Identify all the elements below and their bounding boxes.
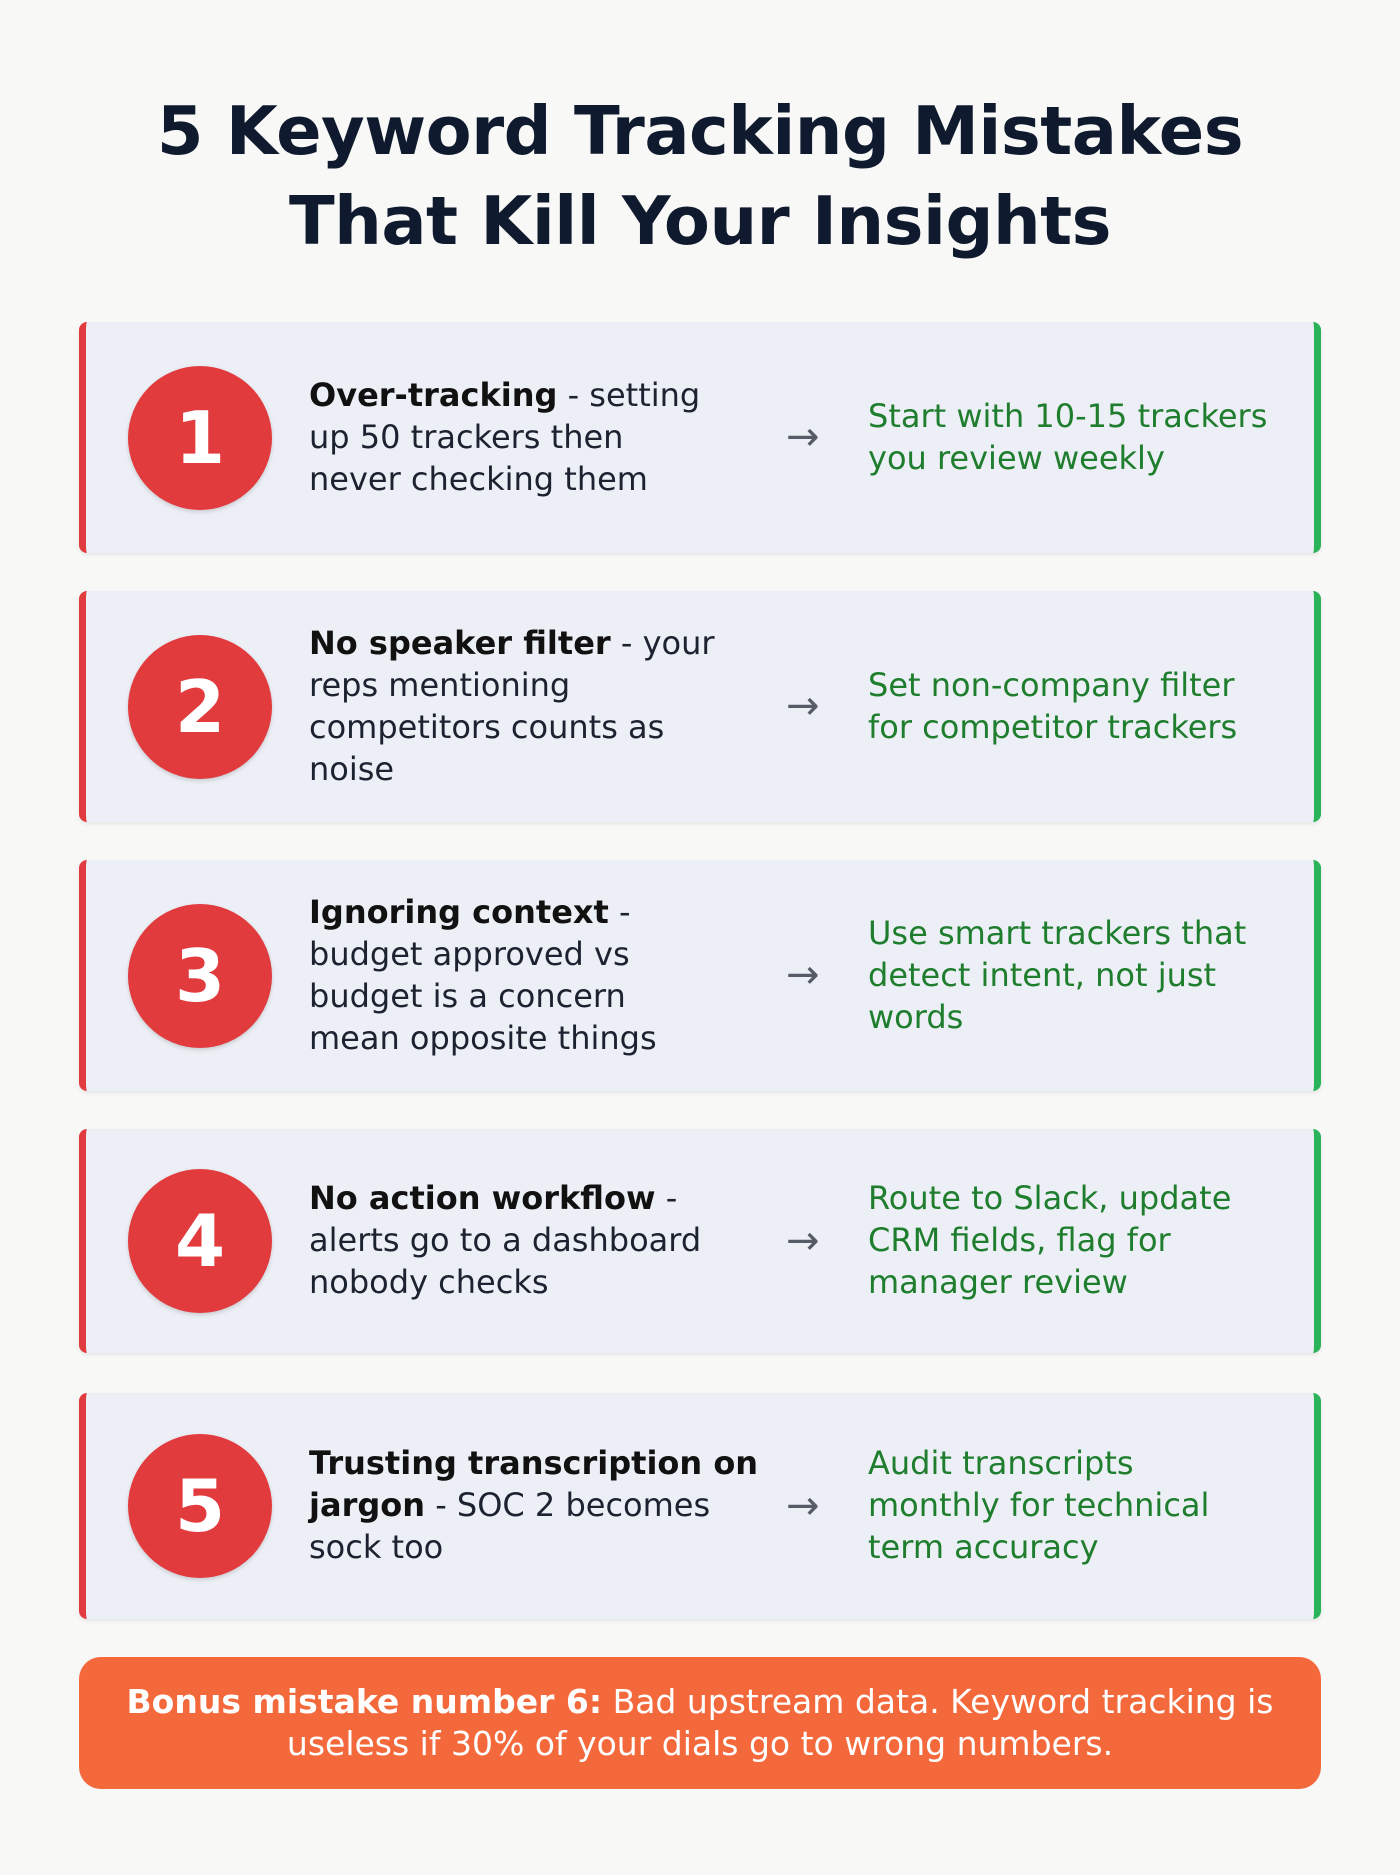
panel: mistake 1 bbox=[79, 322, 1321, 553]
text: mistake 2: No speaker filter - your bbox=[309, 624, 715, 662]
callout: bonus mistake: Bonus mistake number 6: Bad upstream data. Keyword tracking is bbox=[127, 1682, 1273, 1721]
text: fix 1: you review weekly bbox=[868, 439, 1165, 477]
text: mistake 4 bbox=[309, 1179, 701, 1301]
text: fix 1 bbox=[868, 397, 1267, 477]
title: 5 Keyword Tracking Mistakes bbox=[157, 92, 1243, 170]
text: mistake 3: budget approved vs bbox=[309, 935, 630, 973]
panel: mistake 5 bbox=[79, 1393, 1321, 1619]
icon: number 1 bbox=[128, 366, 272, 510]
text: fix 1: Start with 10-15 trackers bbox=[868, 397, 1267, 435]
text: mistake 1: never checking them bbox=[309, 460, 648, 498]
arrow: → bbox=[786, 414, 820, 460]
icon: number 4: 4 bbox=[175, 1199, 225, 1283]
icon: number 3: 3 bbox=[175, 934, 225, 1018]
icon: number 3 bbox=[128, 904, 272, 1048]
panel: mistake 4 bbox=[79, 1129, 1321, 1353]
text: mistake 5: sock too bbox=[309, 1528, 443, 1566]
text: fix 4: CRM fields, flag for bbox=[868, 1221, 1171, 1259]
text: fix 4 bbox=[868, 1179, 1231, 1301]
text: fix 2 bbox=[868, 666, 1237, 746]
text: fix 2: Set non-company filter bbox=[868, 666, 1234, 704]
arrow: → bbox=[786, 1218, 820, 1264]
text: mistake 4: No action workflow - bbox=[309, 1179, 677, 1217]
icon: number 5: 5 bbox=[175, 1464, 225, 1548]
text: mistake 5 bbox=[308, 1444, 758, 1566]
text: fix 3 bbox=[868, 914, 1246, 1036]
panel: mistake 2 bbox=[79, 591, 1321, 822]
text: mistake 1 bbox=[309, 376, 700, 498]
text: fix 4: Route to Slack, update bbox=[868, 1179, 1231, 1217]
text: mistake 4: nobody checks bbox=[309, 1263, 549, 1301]
text: fix 3: words bbox=[868, 998, 963, 1036]
text: fix 3: Use smart trackers that bbox=[868, 914, 1246, 952]
arrow: → bbox=[786, 683, 820, 729]
text: mistake 5: jargon - SOC 2 becomes bbox=[309, 1486, 710, 1524]
text: fix 4: manager review bbox=[868, 1263, 1128, 1301]
icon: number 5 bbox=[128, 1434, 272, 1578]
text: fix 3: detect intent, not just bbox=[868, 956, 1216, 994]
text: mistake 2: competitors counts as bbox=[309, 708, 664, 746]
title bbox=[157, 92, 1243, 260]
text: fix 5: term accuracy bbox=[868, 1528, 1099, 1566]
icon: number 2: 2 bbox=[175, 665, 225, 749]
text: mistake 2: reps mentioning bbox=[309, 666, 570, 704]
text: mistake 4: alerts go to a dashboard bbox=[309, 1221, 701, 1259]
icon: number 4 bbox=[128, 1169, 272, 1313]
title: That Kill Your Insights bbox=[289, 182, 1111, 260]
icon: number 2 bbox=[128, 635, 272, 779]
text: mistake 3: mean opposite things bbox=[309, 1019, 657, 1057]
callout: bonus mistake bbox=[79, 1657, 1321, 1789]
text: mistake 3: Ignoring context - bbox=[309, 893, 631, 931]
text: mistake 2 bbox=[309, 624, 715, 788]
text: mistake 5: Trusting transcription on bbox=[309, 1444, 758, 1482]
text: fix 5: Audit transcripts bbox=[868, 1444, 1134, 1482]
text: fix 5: monthly for technical bbox=[868, 1486, 1209, 1524]
panel: mistake 3 bbox=[79, 860, 1321, 1091]
callout: bonus mistake: useless if 30% of your dials go to wrong numbers. bbox=[287, 1724, 1113, 1763]
text: mistake 3 bbox=[309, 893, 657, 1057]
text: mistake 1: up 50 trackers then bbox=[309, 418, 623, 456]
text: mistake 3: budget is a concern bbox=[309, 977, 626, 1015]
text: fix 2: for competitor trackers bbox=[868, 708, 1237, 746]
arrow: → bbox=[786, 1483, 820, 1529]
text: mistake 1: Over-tracking - setting bbox=[309, 376, 700, 414]
text: mistake 2: noise bbox=[309, 750, 394, 788]
text: fix 5 bbox=[868, 1444, 1209, 1566]
icon: number 1: 1 bbox=[175, 396, 225, 480]
arrow: → bbox=[786, 952, 820, 998]
